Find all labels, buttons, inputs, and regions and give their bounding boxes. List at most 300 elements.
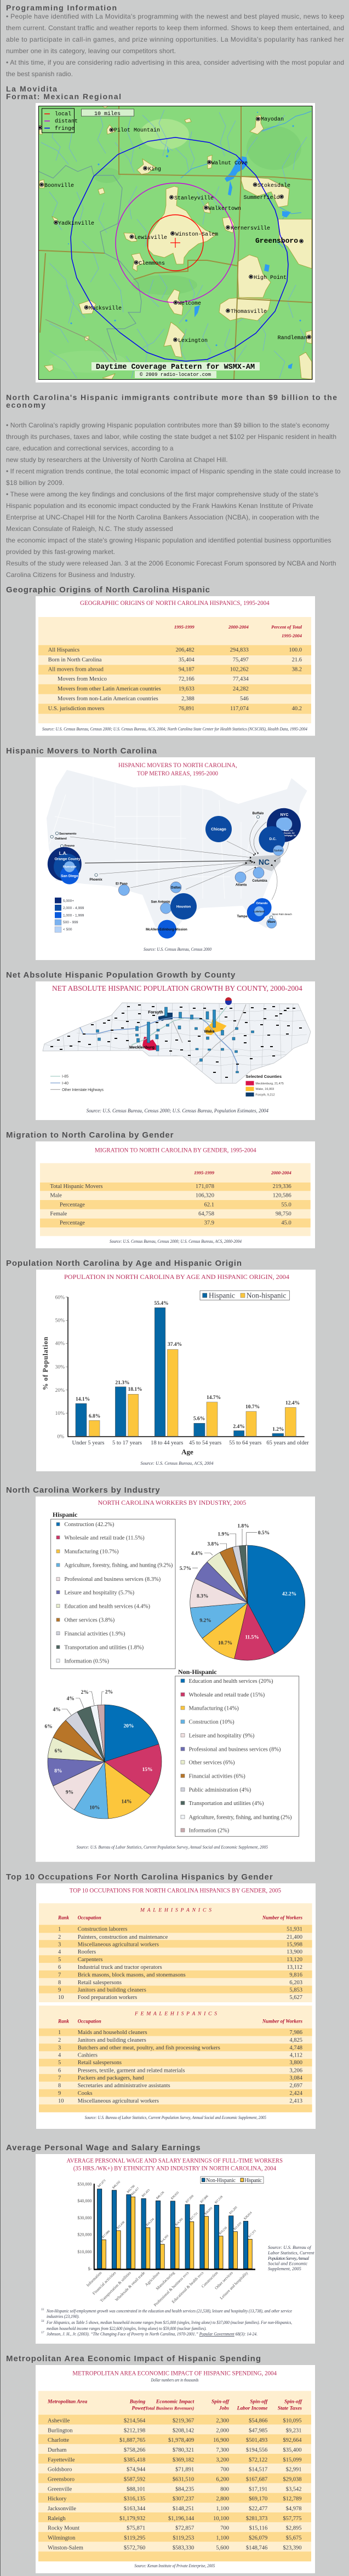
origins table: 24,282 xyxy=(233,686,249,692)
city labels: King xyxy=(148,166,161,173)
y axis: 40% xyxy=(55,1341,65,1347)
metro table: Spin-off xyxy=(211,2399,230,2404)
footnotes: For Hispanics, as Table 5 shows, median household income ranges from $15,000 (singles, living alone) to $37,000 (nuclear families). For non-Hispanics, xyxy=(46,2320,292,2325)
wage value labels: $41,423 xyxy=(141,2188,151,2198)
female occupations table: Occupation xyxy=(78,2019,101,2024)
female occupations table: Retail salespersons xyxy=(78,2060,122,2066)
female occupations table: Butchers and other meat, poultry, and fish processing workers xyxy=(78,2045,220,2051)
panel: metropolitan impact table xyxy=(36,2365,315,2573)
male occupations table: 9,816 xyxy=(289,1972,302,1978)
wage value labels: $27,751 xyxy=(189,2211,199,2221)
metro table: $148,251 xyxy=(173,2506,194,2512)
metro table: Labor Income xyxy=(237,2406,268,2411)
metro bubbles: east: Passaic, NJ xyxy=(284,832,295,834)
metro table: Asheville xyxy=(48,2418,70,2424)
Hispanic legend: Information (0.5%) xyxy=(64,1658,110,1665)
chart legend xyxy=(200,1291,289,1300)
Hispanic legend: Manufacturing (10.7%) xyxy=(64,1549,119,1555)
metro table: Jobs xyxy=(219,2406,229,2411)
Mecklenburg county xyxy=(142,1037,157,1050)
female occupations table: 8 xyxy=(58,2083,61,2089)
bars: 5 to 17 years xyxy=(115,1380,142,1436)
text block: economic study: through its purchases, taxes and labor, while costing the state budget a net $102 per Hispanic resident in health xyxy=(6,433,336,441)
origins table: All movers from abroad xyxy=(48,666,104,673)
county labels: Mecklenburg xyxy=(129,1044,155,1050)
metro bubbles: west: Fresno xyxy=(65,844,75,848)
table title: GEOGRAPHIC ORIGINS OF NORTH CAROLINA HISPANICS, 1995-2004 xyxy=(80,600,270,607)
Non-Hispanic legend: Public administration (4%) xyxy=(188,1787,251,1793)
male occupations table: M A L E H I S P A N I C S xyxy=(140,1908,211,1914)
y axis: 50% xyxy=(55,1318,65,1324)
chart source: Source: U.S. Census Bureau, ACS, 2004 xyxy=(140,1460,214,1466)
origins table: 2,388 xyxy=(181,696,194,702)
male occupations table: Occupation xyxy=(78,1915,101,1920)
metro table: $15,099 xyxy=(283,2457,301,2463)
bars: 45 to 54 years xyxy=(193,1395,221,1436)
metro table: $47,985 xyxy=(249,2428,267,2434)
Hispanic legend xyxy=(51,1511,175,1669)
female occupations table: 2,424 xyxy=(289,2090,303,2097)
metro table: 3,200 xyxy=(216,2457,229,2463)
text block: programming description: them current. Constant traffic and weather reports to keep them informed. Shows to keep them entertained, and xyxy=(6,24,344,32)
Non-Hispanic pie chart: 2% xyxy=(81,1690,89,1695)
text block: economic study: Hispanic population and its economic impact conducted by the Frank Hawkins Kenan Institute of Private xyxy=(6,502,313,510)
Hispanic pie chart: 10.7% xyxy=(218,1641,232,1646)
metro table: 6,200 xyxy=(216,2477,229,2482)
female occupations table: Cooks xyxy=(78,2090,93,2097)
Hispanic legend: Education and health services (4.4%) xyxy=(64,1603,150,1610)
chart legend: Non-hispanic xyxy=(247,1291,286,1300)
male occupations table: 9 xyxy=(58,1987,61,1994)
female occupations table: Rank xyxy=(58,2019,70,2024)
metro table: Winston-Salem xyxy=(48,2545,83,2551)
female occupations table: 3,084 xyxy=(289,2075,303,2081)
metro table: $163,344 xyxy=(124,2506,146,2512)
city labels: High Point xyxy=(254,275,287,281)
text block: economic study xyxy=(6,421,341,579)
metro table: $148,746 xyxy=(246,2545,267,2551)
gender table: Male xyxy=(50,1192,62,1199)
metro table: 800 xyxy=(220,2486,229,2492)
wage value labels: $31,203 xyxy=(228,2206,238,2215)
wage value labels: $43,790 xyxy=(126,2184,136,2194)
metro table: $780,321 xyxy=(173,2447,194,2453)
wage value labels: $42,417 xyxy=(130,2186,140,2196)
bars: Leisure and hospitality xyxy=(243,2221,252,2269)
metro table: $9,231 xyxy=(286,2428,301,2434)
text block: economic study: Enterprise at UNC-Chapel Hill for the North Carolina Bankers Association (NCBA), in cooperation with the xyxy=(6,513,319,521)
gender table: 1995-1999 xyxy=(194,1170,215,1175)
scale bar: 10 miles xyxy=(81,109,134,117)
map source: Source: U.S. Census Bureau, Census 2000 xyxy=(144,946,212,952)
origins table xyxy=(38,617,311,723)
metro table: $219,367 xyxy=(173,2418,194,2424)
male occupations table: 4 xyxy=(58,1949,61,1955)
bars: Agriculture xyxy=(156,2201,164,2269)
Non-Hispanic legend: Education and health services (20%) xyxy=(188,1678,273,1684)
origins table: 75,497 xyxy=(233,657,249,663)
metro table: Charlotte xyxy=(48,2437,69,2443)
heading: Net Absolute Growth: Net Absolute Hispanic Population Growth by County xyxy=(6,970,236,980)
gender table: 62.1 xyxy=(204,1202,214,1208)
city labels: Clemmons xyxy=(139,260,165,267)
metro table: 1,100 xyxy=(216,2535,229,2541)
wage value labels: $28,014 xyxy=(243,2211,253,2220)
bars: 45 to 54 years: 14.7% xyxy=(207,1395,221,1401)
city labels xyxy=(38,116,311,344)
wage axes: $- xyxy=(88,2266,92,2271)
map legend: 500 - 999 xyxy=(63,921,78,924)
female occupations table: 4,112 xyxy=(290,2053,302,2058)
female occupations table: Packers and packagers, hand xyxy=(78,2075,144,2081)
North Carolina shape xyxy=(241,855,281,871)
metro table: $208,142 xyxy=(173,2428,194,2434)
legend: distant xyxy=(55,118,78,125)
female occupations table: Cashiers xyxy=(78,2053,98,2058)
Hispanic pie chart: 1.8% xyxy=(237,1523,249,1529)
gender table: 98,750 xyxy=(276,1211,291,1217)
metro table: Greensboro xyxy=(48,2477,75,2482)
metro table: $1,978,409 xyxy=(168,2437,194,2443)
city labels: Kernersville xyxy=(231,225,270,232)
map legend: 1,000 - 1,999 xyxy=(63,914,84,917)
male occupations table: 1 xyxy=(58,1927,61,1932)
x axis labels: 5 to 17 years xyxy=(112,1440,142,1446)
metro table: Rocky Mount xyxy=(48,2526,79,2532)
female occupations table: 2,413 xyxy=(289,2098,302,2104)
highways xyxy=(131,1007,227,1045)
Hispanic legend: Hispanic xyxy=(53,1511,78,1518)
female occupations table: 3,206 xyxy=(289,2068,302,2074)
Non-Hispanic pie chart: 2% xyxy=(105,1690,113,1695)
wage value labels: $37,920 xyxy=(185,2194,194,2204)
female occupations table: 2 xyxy=(58,2037,61,2043)
Hispanic pie chart: 8.3% xyxy=(197,1593,208,1599)
metro table: $17,191 xyxy=(249,2486,267,2492)
male occupations table: 8 xyxy=(58,1980,61,1986)
Non-Hispanic pie chart xyxy=(44,1690,162,1819)
metro table: 1,100 xyxy=(216,2506,229,2512)
Hispanic legend: Construction (42.2%) xyxy=(64,1522,115,1528)
origins table: 2000-2004 xyxy=(228,624,249,630)
text block: economic study: Mexican Consulate of Raleigh, N.C. The study assessed xyxy=(6,525,173,533)
heading: Migration by Gender: Migration to North Carolina by Gender xyxy=(6,1130,174,1140)
x axis labels: 45 to 54 years xyxy=(189,1440,221,1446)
male occupations table: 2 xyxy=(58,1934,61,1940)
gender table: Percentage xyxy=(60,1202,85,1208)
metro table: Economic Impact xyxy=(156,2399,194,2404)
text block: economic study: care, education and correctional services, according to a xyxy=(6,444,174,452)
metro table: Metropolitan Area xyxy=(47,2399,87,2404)
metro table: $501,493 xyxy=(246,2437,267,2443)
industry axis labels: Financial activities xyxy=(91,2270,117,2296)
male occupations table: 21,400 xyxy=(287,1934,302,1940)
text block: economic study: Carolina Citizens for Business and Industry. xyxy=(6,571,135,579)
wage value labels: $40,126 xyxy=(156,2190,165,2200)
origins table: 38.2 xyxy=(292,666,302,673)
chart title: POPULATION IN NORTH CAROLINA BY AGE AND HISPANIC ORIGIN, 2004 xyxy=(64,1274,289,1281)
bars: 18 to 44 years: 55.4% xyxy=(154,1301,169,1306)
metro table: $572,760 xyxy=(124,2545,145,2551)
county labels: Forsyth xyxy=(148,1009,163,1015)
map legend xyxy=(55,898,84,933)
Hispanic pie chart: 42.2% xyxy=(282,1591,296,1597)
wage value labels: $14,393 xyxy=(160,2234,169,2243)
male occupations table: 7 xyxy=(58,1972,61,1978)
wage axes: $20,000 xyxy=(77,2232,91,2237)
heading: Metropolitan Impact: Metropolitan Area Economic Impact of Hispanic Spending xyxy=(6,2354,261,2363)
female occupations table: 4,825 xyxy=(289,2037,302,2043)
gender table: 171,078 xyxy=(196,1184,214,1190)
female occupations table: 3,800 xyxy=(289,2060,302,2066)
gender table: 2000-2004 xyxy=(271,1170,291,1175)
city labels: Walnut Cove xyxy=(211,160,248,167)
panel: coverage map xyxy=(36,103,315,382)
NC county map xyxy=(43,997,321,1085)
migration arrows xyxy=(70,820,289,900)
text block: economic study: $18 billion by 2009. xyxy=(6,479,64,487)
US base map xyxy=(47,770,307,939)
metro table: $15,116 xyxy=(249,2526,267,2532)
metro table: 5,600 xyxy=(216,2545,229,2551)
heading: Workers by Industry: North Carolina Workers by Industry xyxy=(6,1486,160,1495)
bars: Construction xyxy=(214,2205,223,2269)
male occupations table: 3 xyxy=(58,1942,61,1947)
chart title: AVERAGE PERSONAL WAGE AND SALARY EARNINGS OF FULL-TIME WORKERS xyxy=(67,2157,283,2164)
metro table: $2,991 xyxy=(286,2467,301,2473)
selected counties legend xyxy=(245,1074,284,1097)
Non-Hispanic pie chart: 10% xyxy=(89,1805,100,1810)
origins table: 35,404 xyxy=(179,657,194,663)
Forsyth county xyxy=(158,1013,173,1021)
table source: Source: U.S. Census Bureau, Census 2000; U.S. Census Bureau, ACS, 2004; North Carolina State Center for Health Statistics (NCSCHS), Health Data, 1995-2004 xyxy=(42,727,307,732)
female occupations table: Secretaries and administrative assistants xyxy=(78,2083,170,2089)
transmitter cross xyxy=(170,238,180,248)
metro table: 700 xyxy=(220,2526,229,2532)
panel: top 10 occupations tables xyxy=(36,1883,316,2129)
industry axis labels: Professional & business svcs xyxy=(153,2270,190,2307)
bars: Under 5 years xyxy=(76,1397,100,1436)
x axis labels: 55 to 64 years xyxy=(229,1440,261,1446)
heading: Geographic Origins: Geographic Origins of North Carolina Hispanic xyxy=(6,585,210,595)
metro bubbles: central: Chicago xyxy=(211,827,226,832)
table source: Source: Kenan Institute of Private Enterprise, 2005 xyxy=(134,2563,215,2568)
y axis: 60% xyxy=(55,1295,65,1301)
metro table: $57,775 xyxy=(283,2516,301,2522)
map title: HISPANIC MOVERS TO NORTH CAROLINA, xyxy=(118,762,237,769)
origins table: 117,074 xyxy=(230,706,249,712)
bars: Wholesale and retail trade xyxy=(141,2198,150,2269)
Hispanic pie chart: 1.9% xyxy=(218,1532,230,1538)
Hispanic pie chart: 0.5% xyxy=(258,1530,270,1536)
metro bubbles: west xyxy=(48,832,129,895)
metro table: $5,675 xyxy=(286,2535,301,2541)
male occupations table: 15,998 xyxy=(287,1942,302,1947)
bars: 18 to 44 years xyxy=(154,1301,182,1436)
metro table: $22,477 xyxy=(249,2506,267,2512)
bars: 45 to 54 years: 5.6% xyxy=(193,1416,205,1422)
male occupations table: Food preparation workers xyxy=(78,1995,137,2001)
metro table: $26,079 xyxy=(249,2535,267,2541)
chart legend: Hispanic xyxy=(209,1291,235,1300)
highway legend xyxy=(50,1075,104,1092)
panel: population by age bar chart xyxy=(36,1270,316,1471)
metro table: $92,664 xyxy=(283,2437,302,2443)
gender table: Total Hispanic Movers xyxy=(50,1184,102,1190)
bars: 5 to 17 years: 18.1% xyxy=(128,1387,142,1392)
Hispanic pie chart xyxy=(180,1523,305,1660)
footnotes: 55 xyxy=(41,2308,44,2311)
Hispanic legend: Leisure and hospitality (5.7%) xyxy=(64,1590,135,1596)
female occupations table: 1 xyxy=(58,2030,61,2036)
bars: Financial activities xyxy=(112,2190,121,2269)
metro table xyxy=(38,2391,311,2561)
metro bubbles: east: Bethpage, NY xyxy=(284,835,296,837)
metro table: Burlington xyxy=(48,2428,73,2434)
wage value labels: $19,216 xyxy=(218,2226,228,2235)
Hispanic legend: Professional and business services (8.3%) xyxy=(64,1577,161,1583)
table title xyxy=(72,2369,277,2383)
metro table: $385,418 xyxy=(124,2457,145,2463)
Wake county xyxy=(205,1019,227,1035)
metro table: $1,179,932 xyxy=(119,2516,145,2522)
metro table: Goldsboro xyxy=(48,2467,72,2473)
bars: 55 to 64 years: 10.7% xyxy=(245,1404,260,1410)
map title xyxy=(118,762,237,777)
origins table: All Hispanics xyxy=(48,647,79,653)
metro bubbles: west: Sacramento xyxy=(59,832,77,836)
metro bubbles: east: Norfolk xyxy=(274,849,283,853)
chart legend: Hispanic xyxy=(244,2178,262,2184)
city labels: Mayodan xyxy=(261,116,284,123)
legend: local xyxy=(55,111,71,117)
table title: METROPOLITAN AREA ECONOMIC IMPACT OF HISPANIC SPENDING, 2004 xyxy=(72,2369,277,2377)
bars: Under 5 years: 14.1% xyxy=(76,1397,90,1402)
chart title: (35 HRS./WK+) BY ETHNICITY AND INDUSTRY IN NORTH CAROLINA, 2004 xyxy=(73,2166,276,2172)
metro table: $71,891 xyxy=(175,2467,194,2473)
chart source: Population Survey, Annual xyxy=(267,2255,310,2261)
metro table: $1,887,765 xyxy=(119,2437,145,2443)
Non-Hispanic pie chart: 6% xyxy=(55,1749,62,1754)
gender table: 45.0 xyxy=(281,1220,291,1226)
male occupations table: Rank xyxy=(58,1915,70,1920)
metro table: $167,687 xyxy=(246,2477,267,2482)
male occupations table: 13,112 xyxy=(287,1964,302,1970)
x axis labels: 18 to 44 years xyxy=(151,1440,183,1446)
metro table: $119,295 xyxy=(124,2535,145,2541)
gender table: 37.9 xyxy=(204,1220,214,1226)
male occupations table: Construction laborers xyxy=(78,1927,128,1932)
metro table: $212,198 xyxy=(124,2428,145,2434)
metro bubbles: east: Bronx, NJ xyxy=(284,830,293,832)
female occupations table: 4 xyxy=(58,2053,61,2058)
Non-Hispanic pie chart: 9% xyxy=(66,1790,73,1795)
metro bubbles: west: El Paso xyxy=(116,882,128,886)
county dashes xyxy=(50,1004,302,1078)
bars: Manufacturing xyxy=(170,2201,179,2269)
city labels: Pilot Mountain xyxy=(114,127,160,134)
metro bubbles: east: Tampa xyxy=(237,915,248,918)
metro table: Greenville xyxy=(48,2486,72,2492)
map caption: © 2009 radio-locator.com xyxy=(140,372,211,378)
wage value labels: $24,391 xyxy=(174,2217,184,2226)
wage value labels: $46,332 xyxy=(112,2180,121,2190)
shield: I-85 xyxy=(225,997,232,1005)
gender table: 106,320 xyxy=(196,1192,214,1199)
metro table: $281,373 xyxy=(246,2516,267,2522)
Non-Hispanic pie chart: 8% xyxy=(54,1769,62,1774)
county labels xyxy=(129,1009,215,1050)
gender table: 120,586 xyxy=(273,1192,291,1199)
city labels: Lewisville xyxy=(134,235,167,241)
metro bubbles: central: San Antonio xyxy=(151,901,170,904)
table title: Dollar numbers are in thousands xyxy=(151,2377,199,2383)
Non-Hispanic legend: Construction (10%) xyxy=(188,1720,234,1726)
female occupations table: Miscellaneous agricultural workers xyxy=(78,2098,159,2104)
Non-Hispanic legend: Financial activities (6%) xyxy=(188,1773,245,1780)
chart legend: Non-Hispanic xyxy=(206,2178,236,2184)
industry axis labels: Agriculture xyxy=(144,2270,161,2287)
metro table: $84,235 xyxy=(175,2486,194,2492)
Hispanic pie chart: 9.2% xyxy=(199,1618,211,1624)
heading: Top 10 Occupations: Top 10 Occupations For North Carolina Hispanics by Gender xyxy=(6,1872,273,1882)
panel: wage and salary chart xyxy=(36,2154,315,2344)
city labels: Stokesdale xyxy=(258,182,290,189)
table source: Source: U.S. Census Bureau, Census 2000; U.S. Census Bureau, ACS, 2000-2004 xyxy=(110,1239,242,1244)
male occupations table: 13,900 xyxy=(287,1949,302,1955)
heading: Population by Age: Population North Carolina by Age and Hispanic Origin xyxy=(6,1259,242,1268)
wage axes: $40,000 xyxy=(77,2198,91,2203)
Hispanic pie chart: 11.5% xyxy=(245,1635,259,1641)
text block: economic study: • If recent migration trends continue, the total economic impact of Hispanic spending in the state could increase to xyxy=(6,467,341,475)
metro table: State Taxes xyxy=(278,2406,302,2411)
male occupations table: Janitors and building cleaners xyxy=(78,1987,146,1994)
panel title: TOP 10 OCCUPATIONS FOR NORTH CAROLINA HISPANICS BY GENDER, 2005 xyxy=(70,1887,281,1894)
metro bubbles: east: Orlando xyxy=(256,902,268,905)
metro bubbles: west: Oakland xyxy=(55,837,67,841)
fringe coverage circle xyxy=(71,138,288,361)
wage value labels: $30,891 xyxy=(204,2206,214,2215)
female occupations table: F E M A L E H I S P A N I C S xyxy=(134,2011,217,2017)
female occupations table: Number of Workers xyxy=(262,2019,302,2024)
y axis: 10% xyxy=(55,1411,65,1416)
city labels: Greensboro xyxy=(255,237,298,245)
chart source: Labor Statistics, Current xyxy=(267,2250,314,2255)
bars: 55 to 64 years xyxy=(233,1404,260,1436)
female occupations table: 7,986 xyxy=(289,2030,302,2036)
metro table: $23,390 xyxy=(283,2545,301,2551)
female occupations table: 6 xyxy=(58,2068,61,2074)
text block: programming description: number one in its category, leaving our competitors short. xyxy=(6,47,176,55)
metro table: 2,800 xyxy=(216,2496,229,2502)
text block: economic study: the economic impact of the state's growing Hispanic population and identified potential business opportunities xyxy=(6,536,331,544)
metro table: $54,866 xyxy=(249,2418,267,2424)
male occupations table: Roofers xyxy=(78,1949,96,1955)
distant coverage circle xyxy=(116,183,235,302)
population growth bars xyxy=(96,1007,254,1073)
city labels: Stanleyville xyxy=(174,195,214,202)
wage value labels: $37,518 xyxy=(214,2195,224,2204)
male occupations table: 6,203 xyxy=(289,1980,302,1986)
gender table: 64,758 xyxy=(198,1211,214,1217)
Hispanic legend: Agriculture, forestry, fishing, and hunting (9.2%) xyxy=(64,1563,173,1568)
metro table: $2,895 xyxy=(286,2526,301,2532)
city labels: Winston-Salem xyxy=(175,231,218,238)
metro table: 2,000 xyxy=(216,2428,229,2434)
footnotes: median household income ranges from $22,600 (singles, living alone) to $59,000 (nuclear families). xyxy=(47,2326,207,2331)
metro table: $631,510 xyxy=(173,2477,194,2482)
city labels: Lexington xyxy=(178,338,208,344)
